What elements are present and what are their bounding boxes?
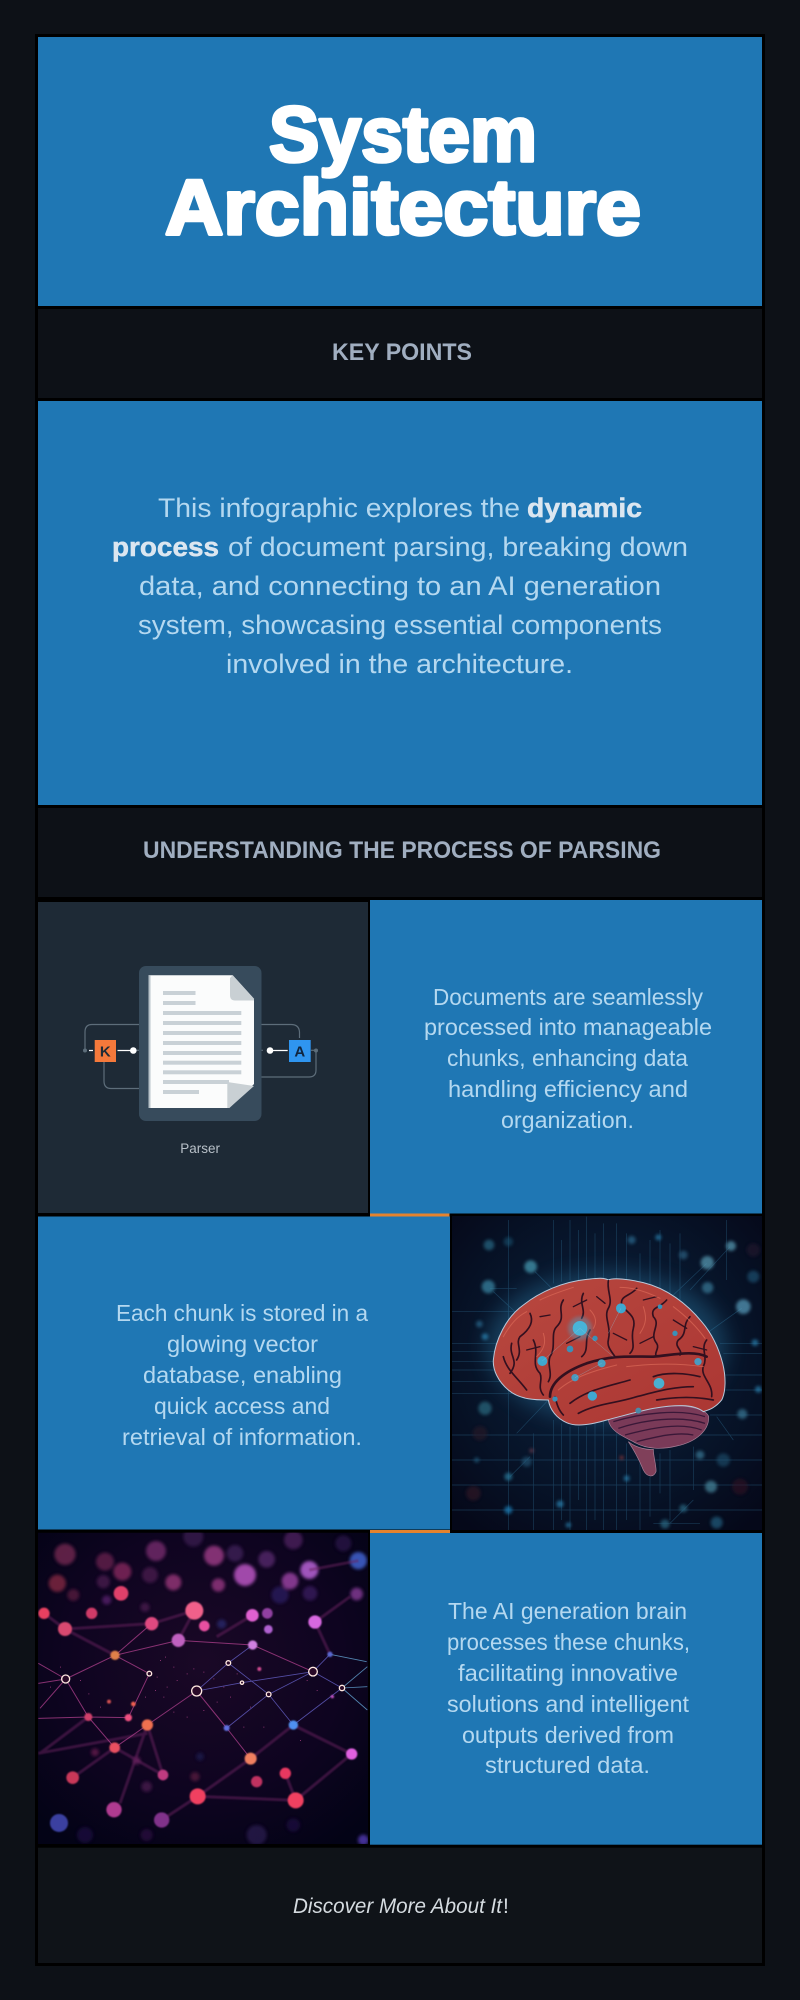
connector lines: [85, 1024, 316, 1088]
text block: AI generation brain: processes these chunks,: [447, 1629, 690, 1655]
text block: AI generation brain: The AI generation brain: [448, 1598, 687, 1624]
call to action: Discover More About It: [293, 1895, 503, 1918]
brain glow: [487, 1272, 727, 1422]
text block: introduction: [112, 493, 688, 679]
text block: vector database: quick access and: [154, 1393, 330, 1419]
text block: vector database: glowing vector: [167, 1331, 318, 1357]
panel: key points heading: [38, 309, 762, 398]
text block: vector database: retrieval of information.: [122, 1424, 362, 1450]
text block: chunks: [424, 984, 712, 1133]
panel: footer: [38, 1848, 762, 1963]
icon: A node: [267, 1040, 318, 1062]
icon: A node: A: [294, 1044, 305, 1060]
text block: introduction: system, showcasing essential components: [138, 610, 662, 640]
ring nodes: [62, 1661, 345, 1697]
panel: vector database text: [38, 1216, 450, 1530]
text block: AI generation brain: outputs derived from: [462, 1722, 674, 1748]
text block: vector database: database, enabling: [143, 1362, 342, 1388]
image: glowing brain: [452, 1216, 762, 1530]
panel: introduction: [38, 401, 762, 805]
panel: process heading: [38, 808, 762, 897]
panel: brain text: [370, 1533, 762, 1845]
panel: parser illustration: [38, 902, 368, 1213]
circuit grid: [452, 1217, 762, 1530]
title: Architecture: [165, 163, 641, 251]
text block: AI generation brain: facilitating innovative: [458, 1660, 678, 1686]
panel: chunks text: [370, 900, 762, 1214]
text block: chunks: processed into manageable: [424, 1014, 712, 1040]
icon: document card: [139, 966, 262, 1121]
text block: vector database: Each chunk is stored in a: [116, 1300, 368, 1326]
bright links: [38, 1624, 313, 1759]
thick faded links: [38, 1561, 358, 1820]
text block: AI generation brain: structured data.: [485, 1752, 650, 1778]
text block: chunks: organization.: [501, 1107, 634, 1133]
text block: chunks: Documents are seamlessly: [433, 984, 703, 1010]
text block: introduction: dynamic: [527, 493, 642, 523]
faded background orbs: [49, 1527, 369, 1845]
accent line: row one: [370, 1214, 450, 1216]
text block: introduction: of document parsing, breaking down: [228, 532, 688, 562]
background nodes: [466, 1234, 762, 1529]
heading: key points: KEY POINTS: [332, 339, 472, 366]
label: parser: Parser: [180, 1140, 220, 1156]
glowing nodes: [38, 1586, 357, 1832]
text block: AI generation brain: [447, 1598, 690, 1778]
dot cloud: [50, 1657, 318, 1741]
text block: introduction: involved in the architecture.: [226, 649, 573, 679]
title: [165, 90, 641, 251]
text block: introduction: process: [112, 532, 219, 562]
icon: K node: [83, 1040, 137, 1062]
title: System: [269, 90, 537, 178]
text block: AI generation brain: solutions and intelligent: [447, 1691, 690, 1717]
text block: vector database: [116, 1300, 368, 1450]
heading: understanding the process: UNDERSTANDING THE PROCESS OF PARSING: [143, 837, 661, 864]
call to action: !: [503, 1895, 509, 1918]
accent line: row two: [370, 1530, 450, 1533]
neural nodes on brain: [537, 1303, 702, 1414]
text block: introduction: This infographic explores the: [158, 493, 520, 523]
brain body: [493, 1278, 725, 1476]
icon: K node: K: [100, 1044, 111, 1060]
text block: chunks: chunks, enhancing data: [447, 1045, 688, 1071]
image: particle network: [38, 1527, 369, 1845]
panel: title banner: [38, 37, 762, 306]
text block: introduction: data, and connecting to an AI generation: [139, 571, 661, 601]
text block: chunks: handling efficiency and: [448, 1076, 688, 1102]
